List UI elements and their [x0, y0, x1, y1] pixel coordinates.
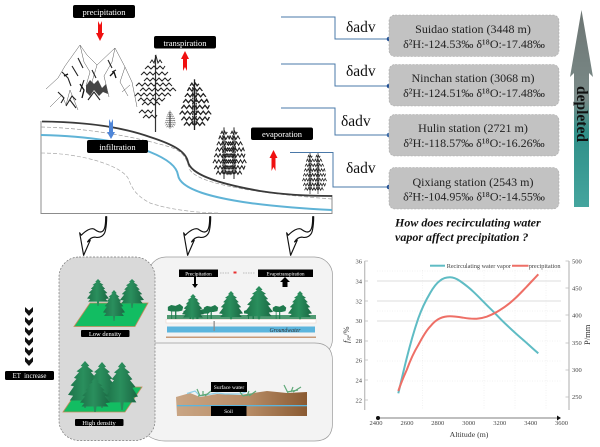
- station box: Ninchan: δ²H:-124.51‰ δ¹⁸O:-17.48‰: [403, 86, 545, 100]
- label: dadv 2: δadv: [346, 63, 376, 80]
- soil block: [176, 391, 307, 416]
- x axis: [376, 416, 561, 420]
- label: Precipitation: Precipitation: [185, 272, 212, 278]
- axis lines: [365, 261, 569, 410]
- arrow: recharge: [214, 321, 215, 331]
- station box: Hulin: Hulin station (2721 m): [418, 121, 528, 135]
- left axis labels: [356, 258, 363, 404]
- connector: Suidao: [281, 17, 391, 41]
- icon: sketch tree small: [164, 110, 176, 129]
- label: Low density: [81, 330, 130, 338]
- station box: Suidao: Suidao station (3448 m): [415, 22, 531, 36]
- label: ET increase: ET increase: [13, 373, 46, 380]
- land surface line: [42, 122, 332, 196]
- station box: Qixiang: Qixiang station (2543 m): [413, 175, 533, 189]
- x axis labels: 3200: [493, 420, 506, 427]
- label: Groundwater: Groundwater: [269, 328, 301, 334]
- axis titles: f: [341, 339, 351, 343]
- arrow: squiggle middle: [183, 216, 212, 256]
- right axis labels: 350: [572, 340, 582, 347]
- left axis labels: 28: [356, 338, 362, 345]
- connector: Ninchan: [281, 64, 391, 88]
- label: Precipitation: [179, 270, 218, 278]
- label: High density: [75, 419, 124, 427]
- x axis labels: [370, 420, 568, 427]
- dashed upper soil line: [41, 127, 332, 199]
- tree row: [167, 286, 316, 322]
- ground band: [166, 320, 316, 323]
- station box: Suidao: δ²H:-124.53‰ δ¹⁸O:-17.48‰: [403, 37, 545, 51]
- label: Surface water: [211, 382, 247, 392]
- x axis labels: 2800: [431, 420, 444, 427]
- label: depleted: depleted: [573, 86, 590, 142]
- icon: sketch tree tall: [135, 55, 176, 132]
- legend: [430, 263, 561, 270]
- right axis labels: [572, 258, 582, 401]
- connector: Qixiang: [290, 152, 391, 189]
- soil strip: [166, 336, 316, 338]
- left axis labels: 36: [356, 258, 363, 266]
- label: ET increase: [5, 371, 54, 380]
- dashed lower soil line: [41, 153, 220, 213]
- water table: [177, 405, 307, 406]
- axis titles: /%: [341, 326, 351, 336]
- station box: Ninchan: Ninchan station (3068 m): [412, 71, 534, 85]
- station box: Ninchan: [389, 64, 559, 106]
- label: evaporation: [251, 128, 313, 140]
- x axis labels: 3600: [555, 420, 568, 427]
- question text: [394, 216, 541, 244]
- arrow: evaporation: [270, 150, 278, 171]
- station box: Qixiang: [389, 168, 559, 209]
- panel: vegetation density: [59, 257, 155, 440]
- question text: vapor affect precipitation ?: [395, 230, 528, 244]
- right axis labels: 400: [572, 312, 582, 320]
- arrow: precipitation: [96, 21, 104, 41]
- curve: precipitation: [398, 274, 538, 391]
- arrow: precipitation down: [192, 277, 198, 288]
- connector: Hulin: [281, 108, 391, 137]
- label: High density: High density: [82, 420, 116, 427]
- arrow: squiggle right: [286, 216, 314, 256]
- label: Surface water: Surface water: [214, 384, 244, 391]
- question text: How does recirculating water: [394, 216, 541, 230]
- grass: [197, 385, 301, 396]
- label: Soil: [211, 406, 246, 416]
- x axis labels: 2600: [400, 420, 414, 427]
- grid: [377, 270, 561, 410]
- icon: sketch tree right: [179, 79, 212, 130]
- right axis labels: 500: [572, 258, 582, 266]
- low density plot: [74, 279, 148, 326]
- label: transpiration: transpiration: [164, 38, 207, 48]
- label: Evapotranspiration: Evapotranspiration: [266, 272, 305, 278]
- x axis title: Altitude (m): [450, 430, 489, 439]
- right axis labels: 250: [572, 394, 582, 401]
- label: precipitation: precipitation: [83, 7, 126, 17]
- x axis labels: 3400: [524, 420, 537, 427]
- x axis labels: 3000: [462, 420, 475, 427]
- dashed link: [220, 272, 255, 274]
- panel: vegetation and groundwater: [148, 257, 332, 357]
- groundwater line: [41, 135, 332, 210]
- panel: surface water and soil: [147, 343, 332, 441]
- left axis labels: 30: [356, 318, 362, 325]
- station box: Suidao: [389, 15, 559, 56]
- right axis labels: 450: [572, 286, 582, 292]
- legend: Recirculating water vapor: [447, 263, 511, 270]
- icon: mountains: [46, 45, 137, 110]
- label: precipitation: [73, 5, 135, 18]
- label: dadv 1: δadv: [346, 19, 376, 36]
- arrow: squiggle left: [79, 216, 108, 256]
- label: transpiration: [154, 36, 216, 48]
- panel: terrain cross-section: [41, 121, 332, 214]
- icon: sketch trees pair: [212, 127, 247, 179]
- arrow: evapotranspiration up: [280, 277, 290, 287]
- station box: Hulin: δ²H:-118.57‰ δ¹⁸O:-16.26‰: [403, 136, 545, 150]
- label: Soil: Soil: [224, 409, 233, 415]
- left axis labels: 32: [356, 298, 362, 306]
- high density plot: [63, 361, 142, 412]
- surface water: [187, 391, 246, 396]
- right axis labels: 300: [572, 367, 582, 374]
- label: dadv 3: δadv: [341, 113, 371, 130]
- left axis labels: 34: [356, 278, 363, 286]
- x axis labels: 2400: [370, 420, 382, 427]
- axis titles: re: [346, 336, 352, 341]
- label: infiltration: infiltration: [99, 142, 136, 152]
- legend: precipitation: [529, 263, 561, 270]
- label: Low density: Low density: [89, 331, 122, 338]
- arrow: infiltration: [107, 119, 115, 139]
- curve: recirculating water vapor: [398, 277, 538, 393]
- line chart: [341, 258, 592, 439]
- left axis labels: 22: [356, 398, 362, 404]
- label: infiltration: [87, 140, 148, 153]
- label: evaporation: evaporation: [262, 129, 303, 139]
- icon: sketch tree far right: [302, 153, 327, 194]
- minus sign: [234, 272, 236, 274]
- station box: Hulin: [389, 114, 559, 156]
- station box: Qixiang: δ²H:-104.95‰ δ¹⁸O:-14.55‰: [403, 190, 545, 204]
- right axis title: P/mm: [582, 324, 592, 345]
- arrow: transpiration: [181, 51, 189, 71]
- label: dadv 4: δadv: [346, 160, 376, 177]
- left axis labels: 24: [356, 378, 363, 384]
- left axis labels: 26: [356, 358, 363, 364]
- arrow: depleted gradient: [570, 10, 593, 207]
- icon: chevrons downward: [25, 307, 33, 366]
- label: Evapotranspiration: [258, 270, 313, 278]
- groundwater bar: [167, 326, 315, 332]
